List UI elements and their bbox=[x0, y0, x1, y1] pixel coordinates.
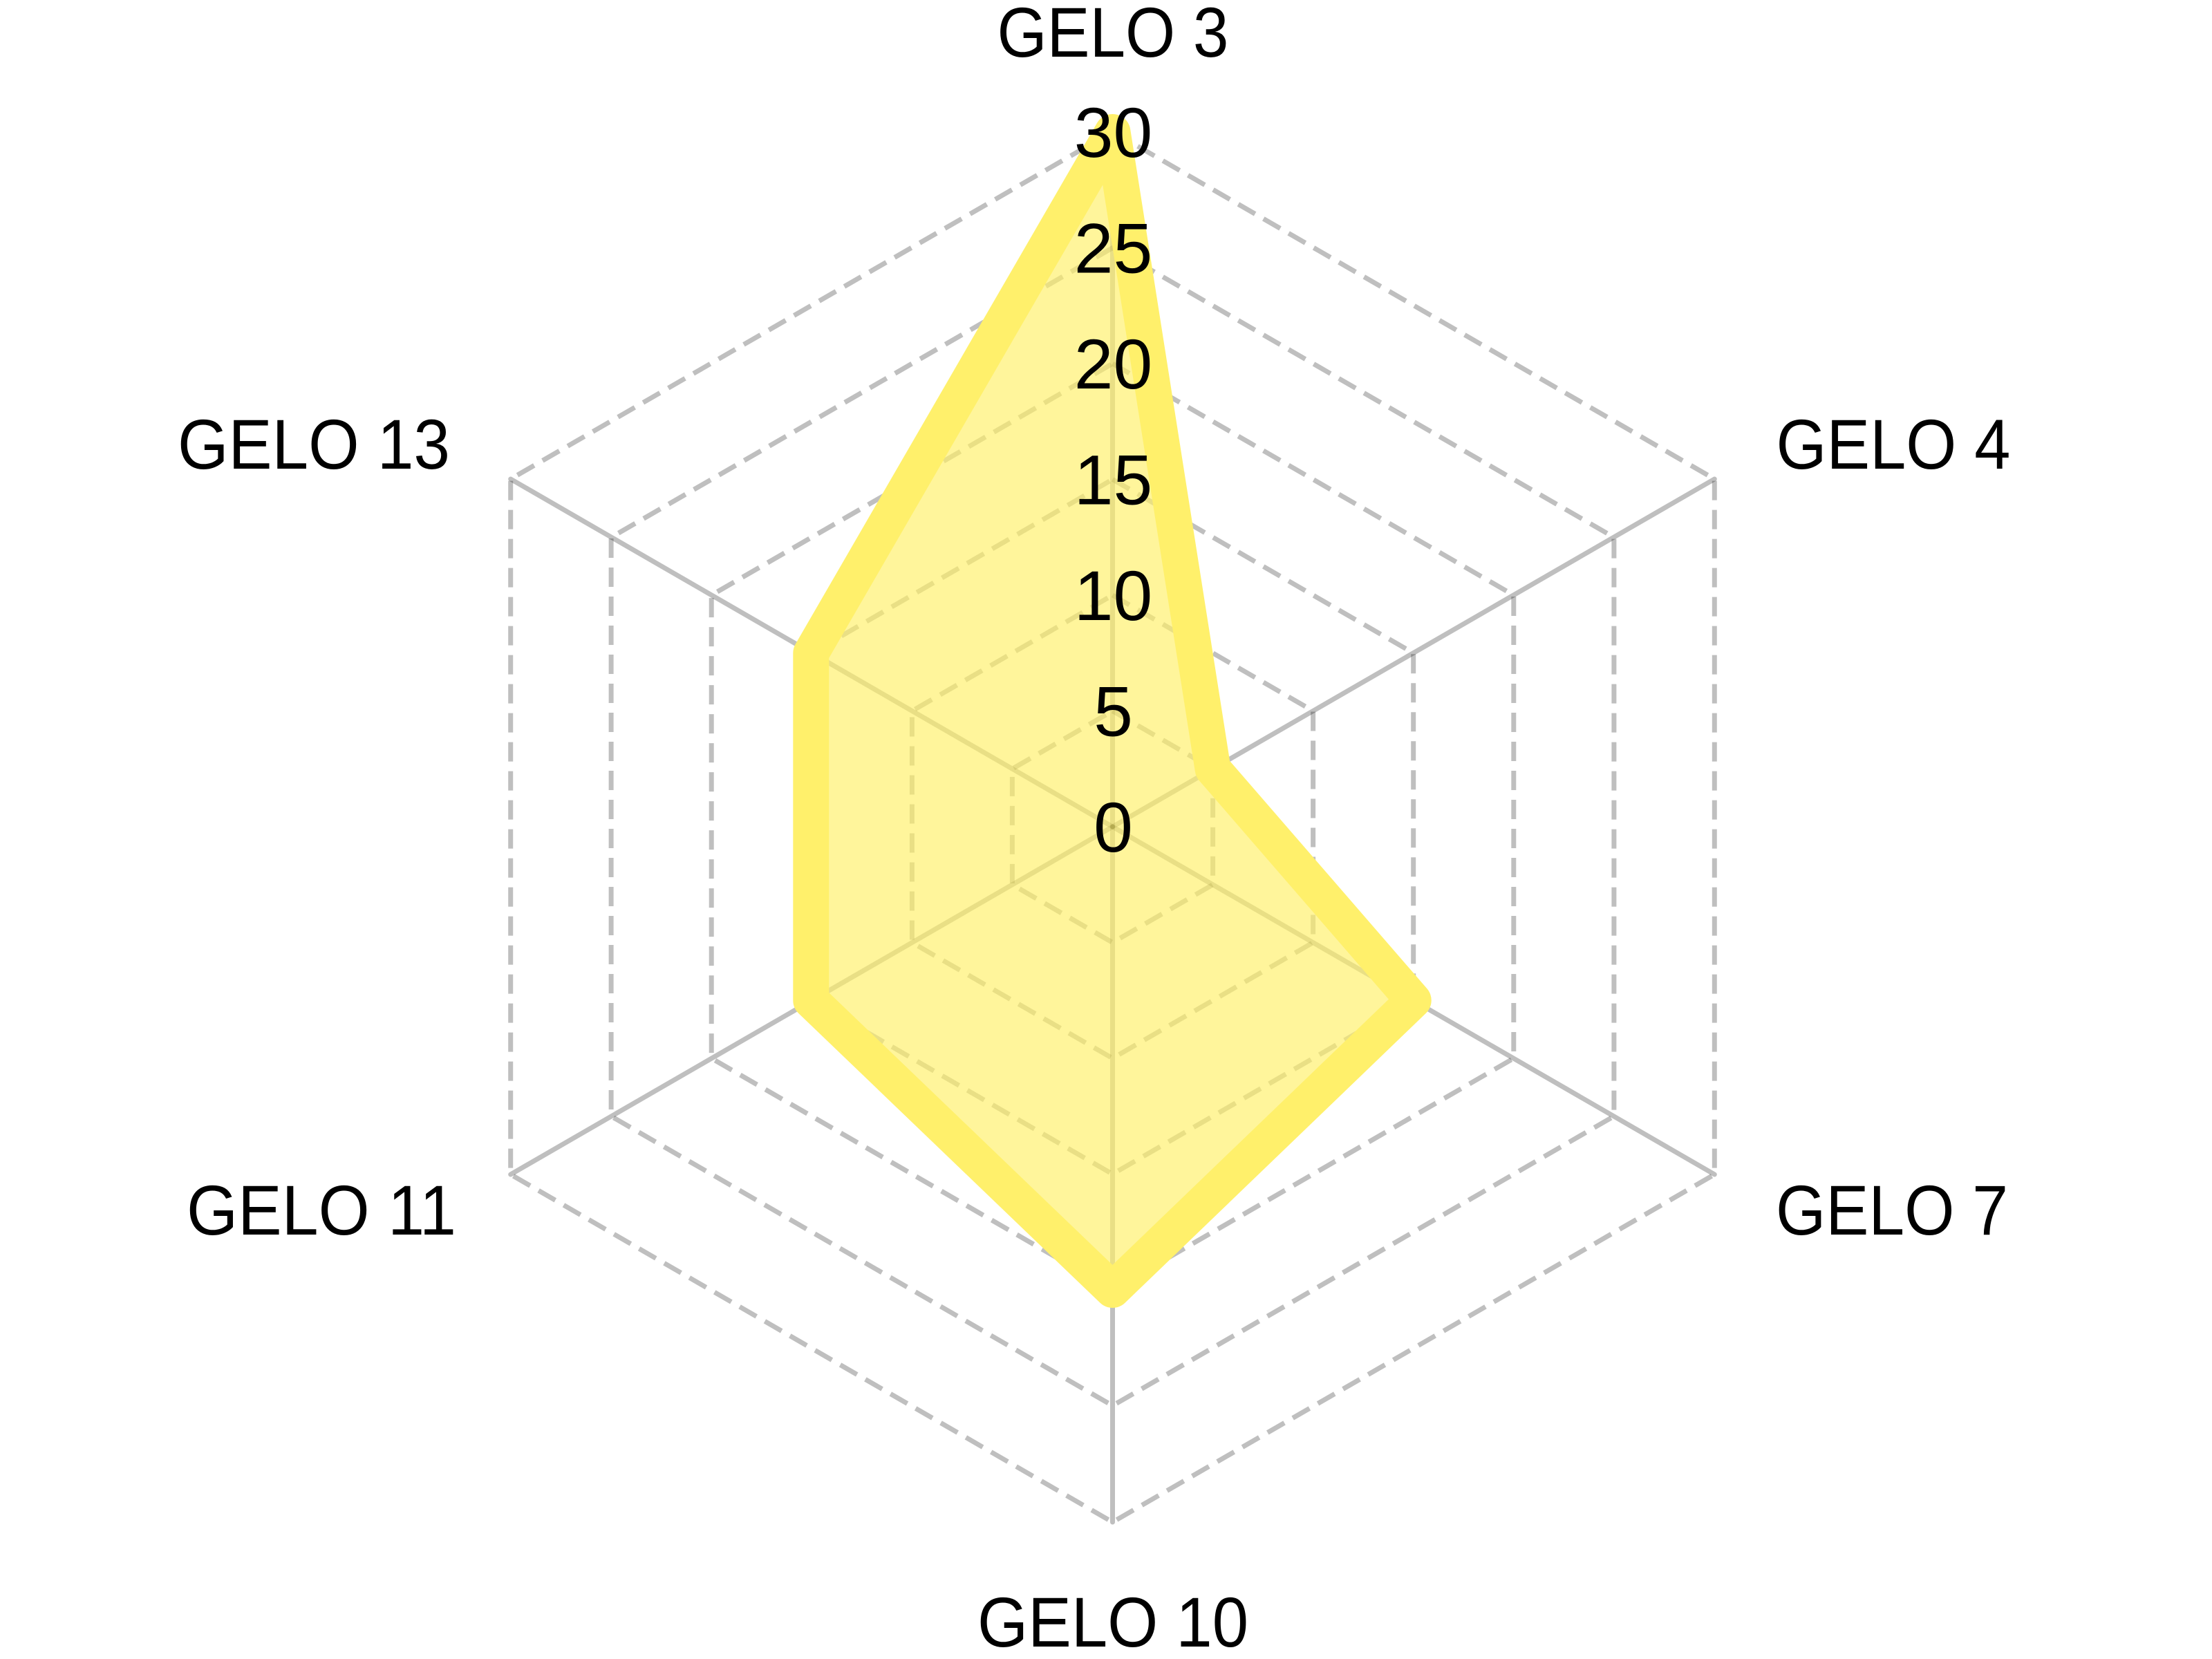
radial axis tick labels bbox=[1074, 93, 1152, 867]
radial axis tick labels: 5 bbox=[1094, 672, 1133, 751]
radar axes bbox=[511, 131, 1714, 1522]
radial axis tick labels: 20 bbox=[1074, 325, 1152, 404]
radial axis tick labels: 10 bbox=[1074, 556, 1152, 635]
radial axis tick labels: 25 bbox=[1074, 209, 1152, 288]
category label: GELO 11: GELO 11 bbox=[187, 1171, 456, 1250]
radar grid: concentric dashed rings bbox=[511, 131, 1714, 1522]
radial axis tick labels: 15 bbox=[1074, 441, 1152, 520]
category label: GELO 7: GELO 7 bbox=[1776, 1171, 2008, 1250]
category label: GELO 13: GELO 13 bbox=[178, 405, 450, 484]
radial axis tick labels: 0 bbox=[1094, 788, 1133, 867]
category label: GELO 4: GELO 4 bbox=[1777, 405, 2010, 484]
radial axis tick labels: 30 bbox=[1074, 93, 1152, 172]
data series: yellow filled polygon bbox=[811, 132, 1414, 1290]
